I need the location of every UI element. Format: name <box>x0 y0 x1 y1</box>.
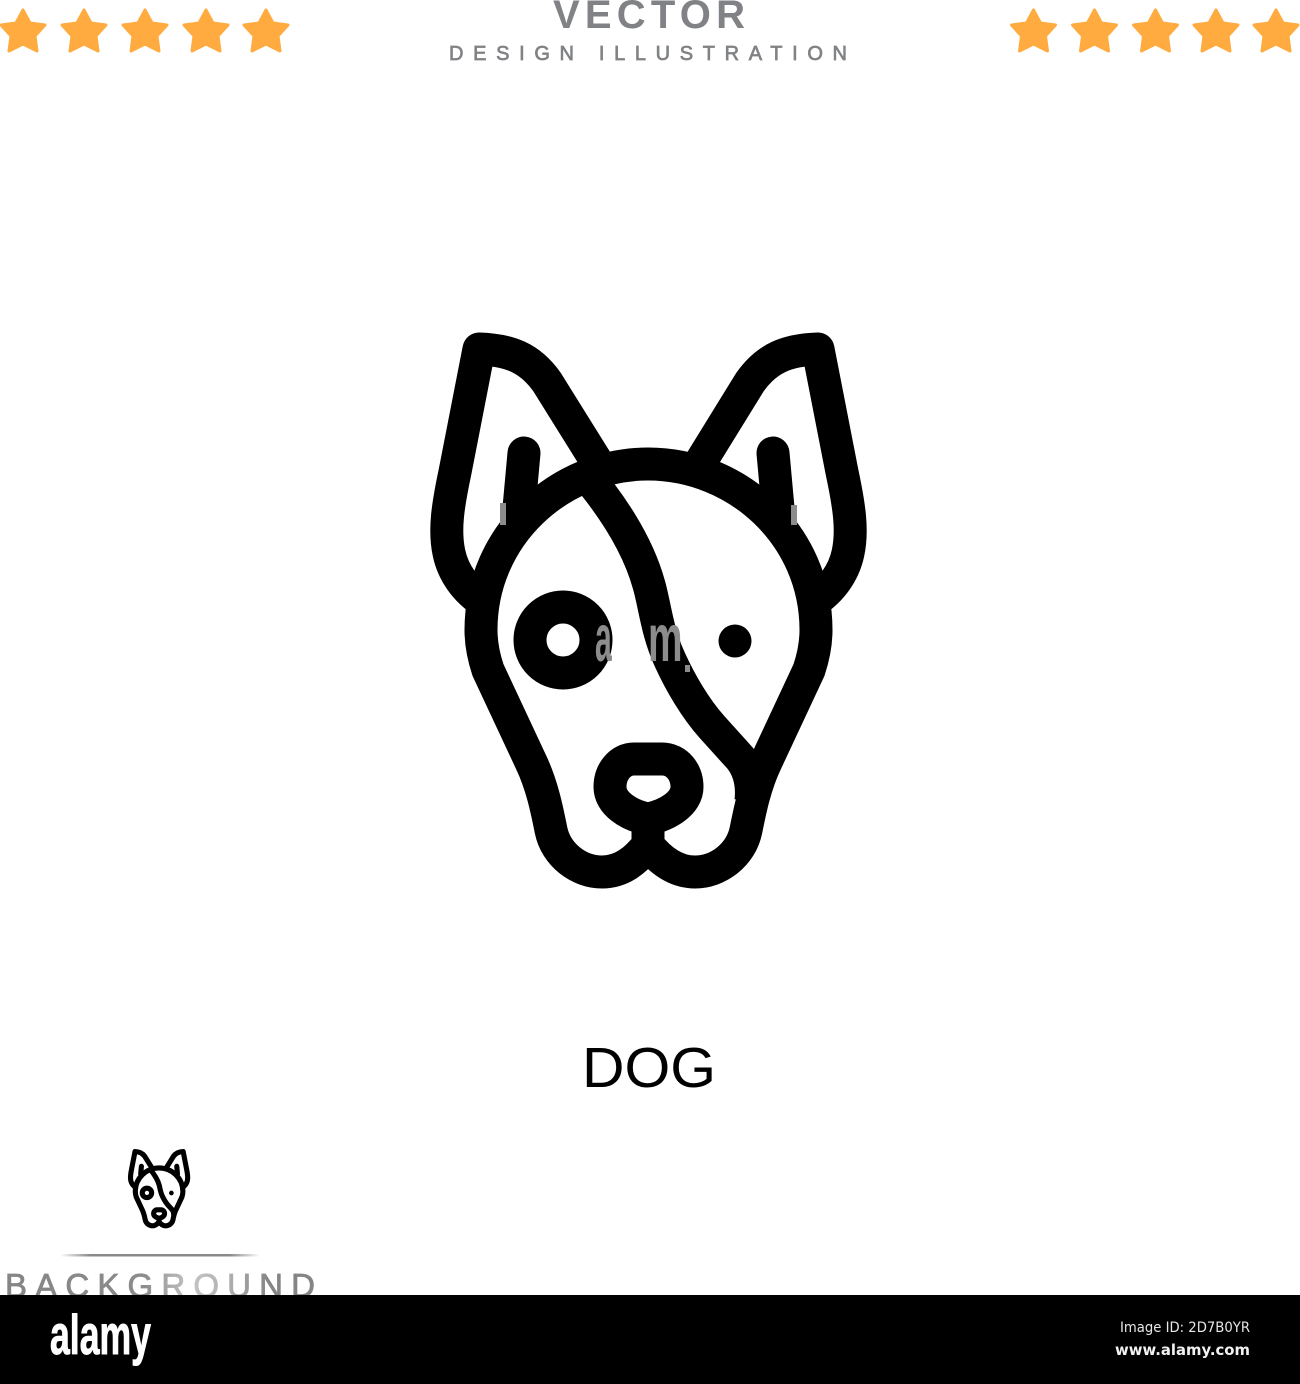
right star rating <box>1012 10 1298 51</box>
left ear fragment <box>500 503 506 525</box>
image id: Image ID: 2D7B0YR <box>1120 1320 1250 1336</box>
label: DOG: DOG <box>582 1036 716 1100</box>
left eye ring <box>530 607 596 673</box>
head and jaw outline <box>481 464 816 872</box>
right ear <box>692 349 850 602</box>
watermark tail <box>685 665 690 672</box>
watermark letter a: a <box>595 602 612 676</box>
icon: small dog head <box>130 1152 188 1226</box>
right eye <box>718 624 752 658</box>
watermark letter m: m <box>648 600 683 676</box>
nose <box>610 759 687 819</box>
left star rating <box>1 10 288 51</box>
face patch line <box>582 470 751 801</box>
logo: alamy: alamy <box>50 1304 151 1366</box>
left inner ear mark <box>519 453 524 508</box>
label: BACKGROUND: BACKGROUND <box>5 1267 315 1304</box>
subheading: DESIGN ILLUSTRATION: DESIGN ILLUSTRATION <box>449 43 847 65</box>
icon: dog head <box>447 349 850 872</box>
website: www.alamy.com <box>1115 1341 1250 1359</box>
right inner ear mark <box>773 453 778 508</box>
watermark fragments <box>500 503 797 676</box>
footer bar <box>0 1295 1300 1384</box>
muzzle line <box>632 815 664 848</box>
left ear <box>447 349 600 602</box>
right ear fragment <box>791 505 797 525</box>
divider line <box>60 1254 260 1256</box>
